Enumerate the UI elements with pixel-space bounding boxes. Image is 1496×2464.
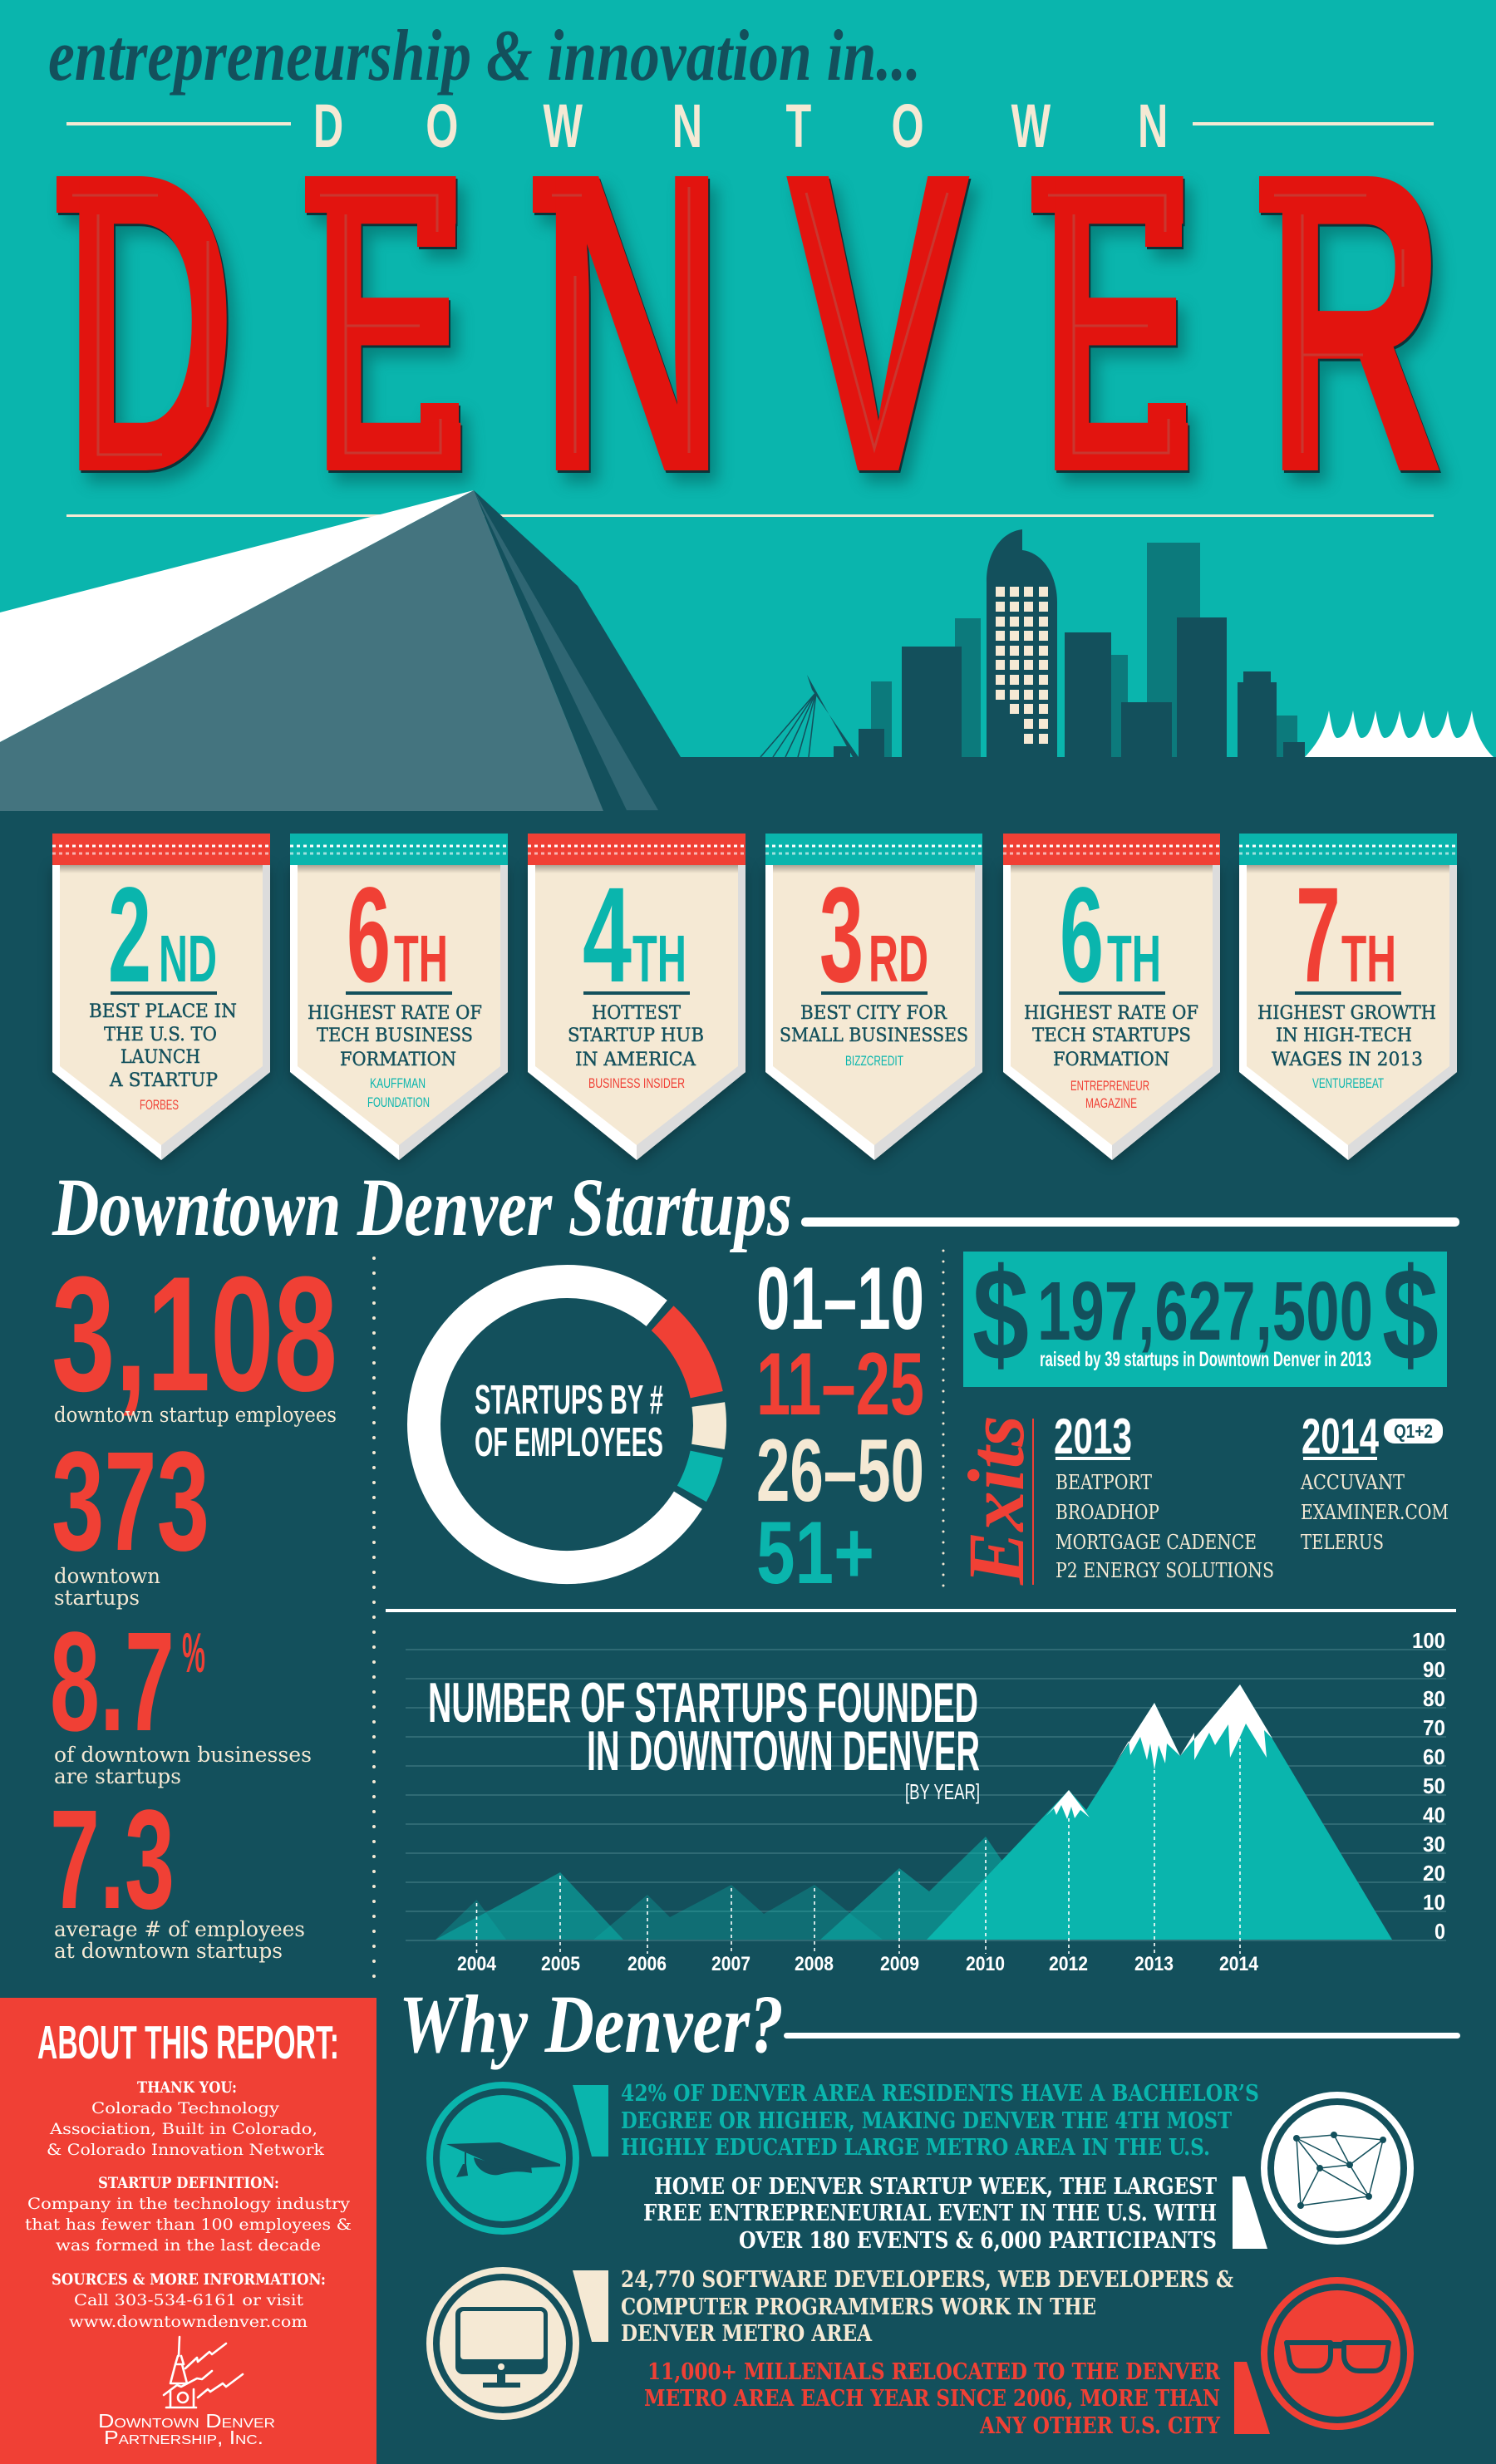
panel: about this report: was formed in the last decade xyxy=(56,2236,321,2255)
y axis labels xyxy=(1412,1628,1445,1944)
ribbon: 7th high-tech wages xyxy=(1239,834,1457,1160)
ribbon: 6th tech business formation: TECH BUSINESS xyxy=(317,1025,473,1046)
y axis labels: 50 xyxy=(1423,1773,1445,1798)
panel: about this report xyxy=(0,1998,376,2464)
stat: 7.3 employees xyxy=(50,1781,305,1963)
stat: 8.7 percent: of downtown businesses xyxy=(54,1743,312,1767)
chart title xyxy=(428,1671,980,1804)
text: educated residents xyxy=(621,2081,1259,2161)
year labels: 2006 xyxy=(627,1953,667,1975)
callout: money raised: $ xyxy=(972,1242,1029,1388)
heading: downtown with rules xyxy=(66,93,1434,160)
y axis labels: 60 xyxy=(1423,1744,1445,1769)
year labels xyxy=(457,1953,1259,1975)
ribbon: 6th tech startups formation: MAGAZINE xyxy=(1085,1095,1137,1111)
panel: about this report: Call 303-534-6161 or visit xyxy=(74,2291,303,2309)
icon: bridge cables xyxy=(760,692,816,757)
exits 2014: TELERUS xyxy=(1301,1531,1384,1554)
panel: about this report: Partnership, Inc. xyxy=(104,2427,263,2448)
exits 2013: BROADHOP xyxy=(1056,1501,1159,1524)
heading: why denver: Why Denver? xyxy=(399,1978,784,2070)
pointer: white xyxy=(1233,2176,1267,2249)
area chart: number of startups founded xyxy=(406,1628,1446,1975)
ribbon: 2nd best place xyxy=(52,834,270,1160)
donut legend: 26–50 xyxy=(756,1420,924,1520)
exits 2014: ACCUVANT xyxy=(1300,1471,1405,1494)
stat: 3,108 employees xyxy=(52,1242,337,1427)
mountains 2004 to 2010 xyxy=(436,1837,1056,1940)
exits 2013: P2 ENERGY SOLUTIONS xyxy=(1056,1559,1274,1582)
exits 2013: 2013 xyxy=(1054,1409,1132,1464)
ribbon: 7th high-tech wages: HIGHEST GROWTH xyxy=(1257,1003,1436,1024)
stat: 7.3 employees: at downtown startups xyxy=(54,1939,283,1963)
chart title: IN DOWNTOWN DENVER xyxy=(587,1719,980,1783)
ribbon: 7th high-tech wages: VENTUREBEAT xyxy=(1312,1075,1384,1091)
ribbon: 6th tech startups formation: HIGHEST RATE OF xyxy=(1024,1003,1198,1024)
panel: about this report: Association, Built in Colorado, xyxy=(49,2120,317,2138)
text: denver startup week: OVER 180 EVENTS & 6,000 PARTICIPANTS xyxy=(739,2228,1217,2254)
ribbon: 7th high-tech wages: 7 xyxy=(1296,858,1341,1011)
y axis labels: 0 xyxy=(1434,1919,1445,1944)
heading: DENVER big letters: V xyxy=(785,84,972,562)
icon: white tents xyxy=(1305,711,1494,757)
icon: network xyxy=(1264,2095,1410,2241)
ribbon: 3rd best city: BIZZCREDIT xyxy=(845,1053,903,1069)
ribbon: 2nd best place: 2 xyxy=(108,858,151,1011)
y axis labels: 40 xyxy=(1423,1803,1445,1827)
stat: 373 startups xyxy=(52,1423,209,1610)
ribbon: 2nd best place: FORBES xyxy=(140,1097,179,1113)
donut chart: startups by employees xyxy=(424,1281,710,1567)
heading: DENVER big letters: E xyxy=(311,85,470,562)
chart title: [BY YEAR] xyxy=(905,1779,980,1804)
exits 2013: BEATPORT xyxy=(1056,1471,1152,1494)
stat: 3,108 employees: downtown startup employees xyxy=(54,1403,337,1427)
tower windows xyxy=(996,587,1048,744)
y axis labels: 20 xyxy=(1423,1861,1445,1886)
y axis labels: 10 xyxy=(1423,1890,1445,1915)
icon: partnership logo xyxy=(164,2337,243,2407)
text: software developers: 24,770 SOFTWARE DEVELOPERS, WEB DEVELOPERS & xyxy=(621,2267,1233,2293)
stat: 373 startups: downtown xyxy=(54,1564,160,1588)
y axis labels: 90 xyxy=(1423,1657,1445,1682)
panel: about this report: Colorado Technology xyxy=(91,2099,279,2117)
ribbon: 6th tech startups formation xyxy=(1003,834,1220,1160)
heading: downtown denver startups: Downtown Denver Startups xyxy=(52,1161,792,1253)
year labels: 2007 xyxy=(711,1953,750,1975)
stat: 7.3 employees: average # of employees xyxy=(54,1917,305,1941)
ribbon: 6th tech business formation: FOUNDATION xyxy=(367,1094,430,1110)
year labels: 2004 xyxy=(457,1953,497,1975)
heading: DENVER big letters: D xyxy=(63,84,237,562)
pointer: red xyxy=(1234,2362,1270,2434)
donut legend xyxy=(756,1248,924,1602)
ribbon: 3rd best city: 3 xyxy=(819,858,864,1011)
icon: glasses xyxy=(1264,2280,1410,2427)
ribbon: 6th tech startups formation: ENTREPRENEUR xyxy=(1070,1078,1149,1094)
ribbon: 6th tech startups formation: 6 xyxy=(1060,858,1104,1011)
ribbon: 7th high-tech wages: IN HIGH-TECH xyxy=(1276,1025,1412,1046)
ribbon: 6th tech business formation: FORMATION xyxy=(340,1050,456,1070)
exits 2014 xyxy=(1300,1409,1449,1554)
stat: 7.3 employees: 7.3 xyxy=(50,1781,175,1939)
y axis labels: 100 xyxy=(1412,1628,1445,1653)
panel: about this report: & Colorado Innovation Network xyxy=(47,2141,325,2159)
ribbon: 6th tech business formation: HIGHEST RATE OF xyxy=(308,1003,482,1024)
heading: DENVER big letters xyxy=(57,84,1444,562)
ribbon: 6th tech startups formation: TECH STARTUPS xyxy=(1032,1025,1191,1046)
ribbon: 4th hottest startup hub: TH xyxy=(632,922,686,996)
icon: graduation cap xyxy=(430,2085,576,2231)
skyline illustration xyxy=(760,529,1494,757)
year labels: 2012 xyxy=(1049,1953,1088,1975)
year markers xyxy=(477,1739,1240,1954)
ribbon: 2nd best place: BEST PLACE IN xyxy=(89,1001,237,1022)
text: millenials relocated xyxy=(644,2359,1221,2439)
heading: downtown denver startups xyxy=(52,1161,1459,1253)
y axis labels: 80 xyxy=(1423,1686,1445,1711)
year labels: 2008 xyxy=(795,1953,834,1975)
ribbon: 3rd best city xyxy=(765,834,982,1160)
chart title: NUMBER OF STARTUPS FOUNDED xyxy=(428,1671,978,1734)
exits 2013: MORTGAGE CADENCE xyxy=(1056,1531,1257,1554)
text: denver startup week: HOME OF DENVER STARTUP WEEK, THE LARGEST xyxy=(654,2174,1217,2200)
ribbon: 3rd best city: RD xyxy=(869,922,928,996)
ribbon: 4th hottest startup hub xyxy=(528,834,746,1160)
ribbon: 2nd best place: LAUNCH xyxy=(121,1047,200,1068)
ribbon: 4th hottest startup hub: STARTUP HUB xyxy=(568,1025,704,1046)
ribbon: 6th tech startups formation: FORMATION xyxy=(1053,1050,1169,1070)
year labels: 2014 xyxy=(1219,1953,1259,1975)
callout: money raised xyxy=(963,1242,1447,1388)
year labels: 2009 xyxy=(880,1953,919,1975)
panel: about this report: www.downtowndenver.com xyxy=(69,2313,308,2331)
ribbon: 3rd best city: SMALL BUSINESSES xyxy=(780,1025,968,1046)
mountains 2012 to 2014 xyxy=(927,1684,1392,1940)
text: millenials relocated: ANY OTHER U.S. CITY xyxy=(979,2413,1221,2439)
stat: 8.7 percent xyxy=(50,1603,312,1788)
donut chart: startups by employees: OF EMPLOYEES xyxy=(475,1420,663,1465)
stat: 373 startups: 373 xyxy=(52,1423,209,1581)
title: entrepreneurship & innovation in: entrepreneurship & innovation in... xyxy=(48,16,921,96)
stat: 3,108 employees: 3,108 xyxy=(52,1242,337,1425)
exits 2014: EXAMINER.COM xyxy=(1301,1501,1449,1524)
year labels: 2010 xyxy=(966,1953,1005,1975)
ribbon: 4th hottest startup hub: IN AMERICA xyxy=(575,1050,696,1070)
ribbon: 7th high-tech wages: TH xyxy=(1341,922,1396,996)
heading: why denver xyxy=(399,1978,1460,2070)
stat: 373 startups: startups xyxy=(54,1586,140,1610)
donut legend: 51+ xyxy=(756,1502,874,1602)
ribbon: 6th tech business formation: 6 xyxy=(347,858,391,1011)
text: educated residents: 42% OF DENVER AREA RESIDENTS HAVE A BACHELOR’S xyxy=(621,2081,1259,2107)
panel: about this report: STARTUP DEFINITION: xyxy=(98,2174,279,2192)
ribbon: 2nd best place: THE U.S. TO xyxy=(104,1025,217,1045)
ribbon: 4th hottest startup hub: BUSINESS INSIDER xyxy=(588,1075,685,1091)
text: educated residents: DEGREE OR HIGHER, MAKING DENVER THE 4TH MOST xyxy=(621,2108,1232,2134)
panel: about this report: ABOUT THIS REPORT: xyxy=(37,2016,339,2069)
heading: DENVER big letters: E xyxy=(1039,84,1197,562)
text: millenials relocated: METRO AREA EACH YEAR SINCE 2006, MORE THAN xyxy=(644,2386,1220,2412)
callout: money raised: $ xyxy=(1382,1242,1439,1388)
ribbon: 6th tech startups formation: TH xyxy=(1107,922,1161,996)
panel: exits xyxy=(952,1409,1449,1586)
panel: about this report: THANK YOU: xyxy=(137,2078,237,2097)
text: denver startup week xyxy=(643,2174,1217,2254)
donut chart: startups by employees: STARTUPS BY # xyxy=(475,1378,663,1423)
ribbon: 3rd best city: BEST CITY FOR xyxy=(800,1003,947,1024)
donut legend: 11–25 xyxy=(756,1334,924,1434)
ribbon: 4th hottest startup hub: HOTTEST xyxy=(592,1003,681,1024)
heading: DENVER big letters: N xyxy=(539,85,726,562)
text: software developers xyxy=(621,2267,1233,2347)
snow caps xyxy=(1046,1684,1272,1819)
text: educated residents: HIGHLY EDUCATED LARGE METRO AREA IN THE U.S. xyxy=(621,2135,1210,2161)
stat: 8.7 percent: are startups xyxy=(54,1764,181,1788)
mountain illustration xyxy=(0,490,681,811)
y axis labels: 70 xyxy=(1423,1715,1445,1740)
panel: about this report: that has fewer than 100 employees & xyxy=(25,2216,352,2234)
exits 2013 xyxy=(1054,1409,1274,1582)
text: software developers: COMPUTER PROGRAMMERS WORK IN THE xyxy=(621,2294,1096,2320)
callout: money raised: 197,627,500 xyxy=(1037,1265,1373,1358)
stat: 8.7 percent: 8.7 xyxy=(50,1603,175,1761)
exits 2014: Q1+2 xyxy=(1394,1420,1433,1442)
heading: downtown with rules: DOWNTOWN xyxy=(313,93,1168,160)
ribbon: 2nd best place: ND xyxy=(159,922,217,996)
ribbon: 6th tech business formation: KAUFFMAN xyxy=(370,1075,426,1091)
panel: about this report: SOURCES & MORE INFORMATION: xyxy=(52,2270,326,2289)
ribbon: 7th high-tech wages: WAGES IN 2013 xyxy=(1272,1050,1423,1070)
stat: 8.7 percent: % xyxy=(182,1621,205,1684)
text: denver startup week: FREE ENTREPRENEURIAL EVENT IN THE U.S. WITH xyxy=(643,2201,1217,2226)
ribbon: 6th tech business formation: TH xyxy=(394,922,448,996)
pointer: cream xyxy=(573,2270,608,2342)
pointer: teal xyxy=(573,2085,608,2157)
icon: monitor xyxy=(430,2270,576,2417)
ribbon: 4th hottest startup hub: 4 xyxy=(583,858,632,1011)
exits 2014: 2014 xyxy=(1302,1409,1379,1464)
heading: DENVER big letters: R xyxy=(1266,84,1444,562)
donut legend: 01–10 xyxy=(756,1248,924,1348)
year labels: 2013 xyxy=(1134,1953,1174,1975)
panel: about this report: Downtown Denver xyxy=(98,2410,275,2432)
panel: about this report: Company in the technology industry xyxy=(27,2195,350,2213)
year labels: 2005 xyxy=(541,1953,580,1975)
ribbon: 6th tech business formation xyxy=(290,834,508,1160)
text: software developers: DENVER METRO AREA xyxy=(621,2321,873,2347)
text: millenials relocated: 11,000+ MILLENIALS RELOCATED TO THE DENVER xyxy=(647,2359,1220,2385)
ribbon: 2nd best place: A STARTUP xyxy=(109,1070,218,1091)
y axis labels: 30 xyxy=(1423,1832,1445,1857)
panel: exits: Exits xyxy=(952,1415,1041,1586)
